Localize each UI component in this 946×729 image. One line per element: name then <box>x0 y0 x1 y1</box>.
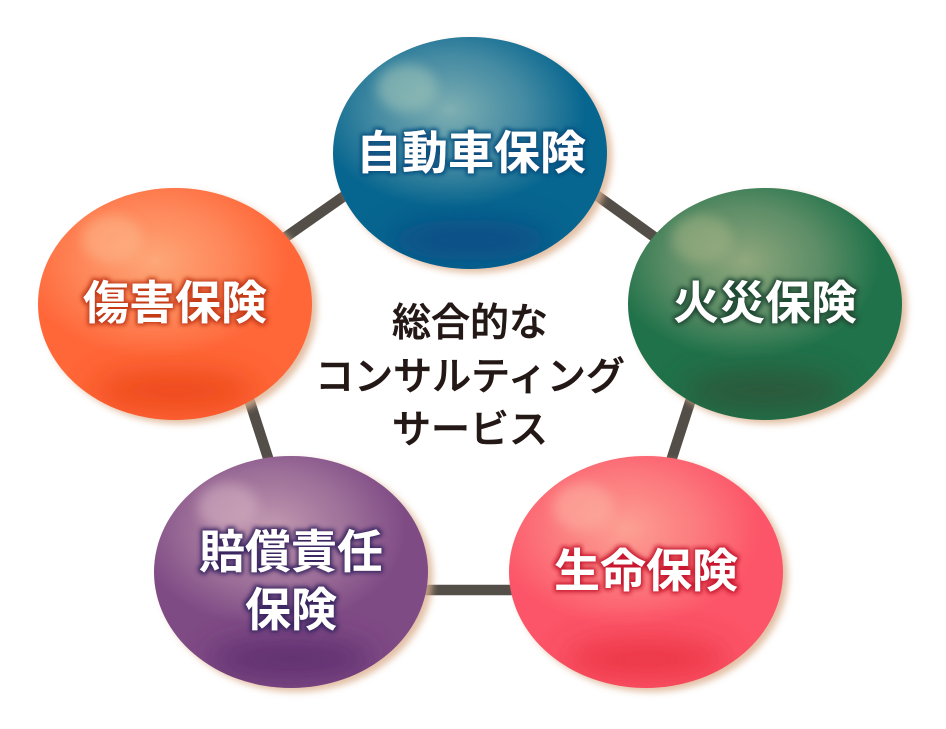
label: 賠償責任保険: 賠償責任 <box>199 526 383 578</box>
label: 生命保険: 生命保険 <box>554 545 738 597</box>
center text: 総合的な <box>392 302 548 345</box>
center text: サービス <box>392 409 548 452</box>
label: 賠償責任保険 <box>199 526 383 636</box>
label: 自動車保険: 自動車保険 <box>356 127 586 179</box>
label: 賠償責任保険: 保険 <box>245 584 337 636</box>
circle: 賠償責任保険 <box>154 456 438 696</box>
circle: 火災保険 <box>628 188 912 428</box>
connector lines <box>248 192 692 590</box>
circle: 傷害保険 <box>38 188 322 428</box>
circle: 自動車保険 <box>333 36 616 278</box>
center text: コンサルティング <box>315 356 625 399</box>
label: 傷害保険: 傷害保険 <box>83 277 267 329</box>
label: 火災保険: 火災保険 <box>673 277 857 329</box>
circle: 生命保険 <box>509 456 792 696</box>
center text <box>315 302 625 452</box>
